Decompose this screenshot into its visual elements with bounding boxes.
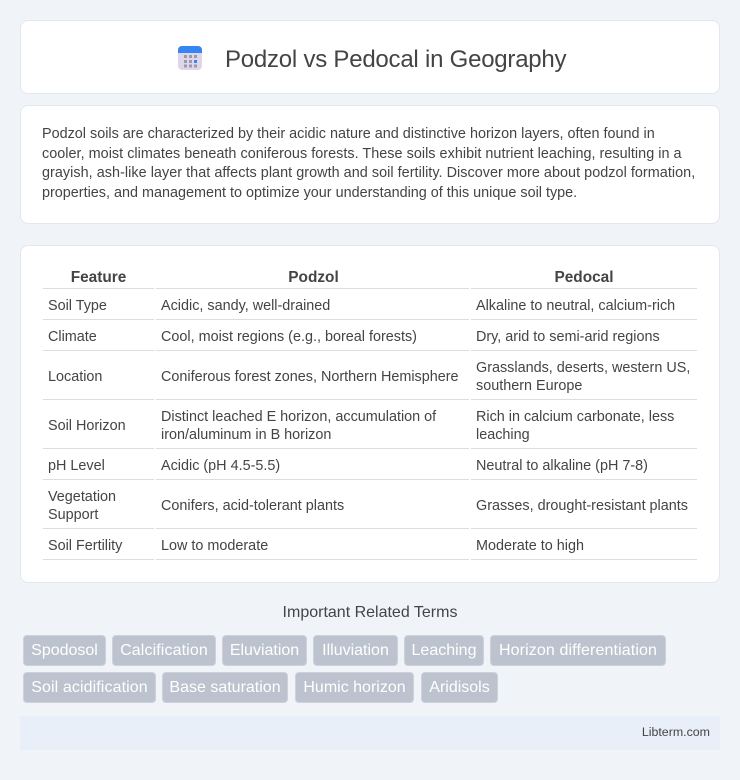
related terms tags xyxy=(23,635,666,703)
column headers: Podzol xyxy=(288,269,339,286)
tag xyxy=(222,635,307,666)
table xyxy=(43,269,697,560)
tag xyxy=(490,635,666,666)
tag: Leaching xyxy=(412,642,476,659)
tag xyxy=(112,635,216,666)
row: pH level: pH Level xyxy=(48,458,105,474)
intro paragraph: cooler, moist climates beneath coniferous forests. These soils exhibit nutrient leaching, resulting in a xyxy=(42,146,682,162)
footer bar xyxy=(20,716,720,750)
row: soil type: Soil Type xyxy=(48,298,107,314)
header panel xyxy=(20,20,720,94)
tag: Base saturation xyxy=(169,679,281,696)
tag: Humic horizon xyxy=(303,679,406,696)
intro paragraph: grayish, ash-like layer that affects plant growth and soil fertility. Discover more about podzol formation, xyxy=(42,165,695,181)
row: soil fertility xyxy=(48,538,584,554)
tag: Illuviation xyxy=(322,642,389,659)
title: Podzol vs Pedocal in Geography xyxy=(225,46,566,73)
icon: calendar xyxy=(178,46,202,70)
row: climate: Climate xyxy=(48,329,97,345)
row: pH level: Acidic (pH 4.5-5.5) xyxy=(161,458,280,474)
row: soil horizon: leaching xyxy=(476,427,530,443)
row: soil type: Alkaline to neutral, calcium-rich xyxy=(476,298,675,314)
intro text panel xyxy=(20,105,720,224)
intro paragraph xyxy=(42,126,695,200)
row: soil fertility: Moderate to high xyxy=(476,538,584,554)
column headers: Feature xyxy=(71,269,126,286)
tag xyxy=(162,672,288,703)
footer credit: Libterm.com xyxy=(642,725,710,739)
row: soil horizon: Soil Horizon xyxy=(48,418,126,434)
row: vegetation support xyxy=(48,489,688,523)
intro paragraph: properties, and management to optimize your understanding of this unique soil type. xyxy=(42,184,577,200)
row: location: Location xyxy=(48,369,102,385)
tag: Spodosol xyxy=(31,642,98,659)
row: vegetation support: Vegetation xyxy=(48,489,116,505)
comparison table panel xyxy=(20,245,720,583)
row: location: Grasslands, deserts, western US, xyxy=(476,360,690,376)
row: soil horizon: iron/aluminum in B horizon xyxy=(161,427,331,443)
tag xyxy=(295,672,414,703)
row: vegetation support: Conifers, acid-tolerant plants xyxy=(161,498,344,514)
column headers: Pedocal xyxy=(554,269,614,286)
row: soil fertility: Soil Fertility xyxy=(48,538,122,554)
tag: Eluviation xyxy=(230,642,299,659)
tag xyxy=(23,672,156,703)
row: soil type xyxy=(48,298,675,314)
related terms heading: Important Related Terms xyxy=(283,604,457,621)
tag: Horizon differentiation xyxy=(499,642,657,659)
row: climate: Dry, arid to semi-arid regions xyxy=(476,329,660,345)
row: pH level: Neutral to alkaline (pH 7-8) xyxy=(476,458,648,474)
row: soil horizon xyxy=(48,409,674,443)
tag: Soil acidification xyxy=(31,679,148,696)
row: soil fertility: Low to moderate xyxy=(161,538,268,554)
row: vegetation support: Grasses, drought-resistant plants xyxy=(476,498,688,514)
tag: Aridisols xyxy=(429,679,490,696)
row: vegetation support: Support xyxy=(48,507,98,523)
row: climate xyxy=(48,329,660,345)
column headers xyxy=(71,269,614,286)
tag xyxy=(421,672,498,703)
tag xyxy=(23,635,106,666)
row: location xyxy=(48,360,690,394)
tag xyxy=(313,635,398,666)
row: pH level xyxy=(48,458,648,474)
tag xyxy=(404,635,484,666)
intro paragraph: Podzol soils are characterized by their acidic nature and distinctive horizon layers, often found in xyxy=(42,126,655,142)
row: climate: Cool, moist regions (e.g., boreal forests) xyxy=(161,329,417,345)
row: location: Coniferous forest zones, Northern Hemisphere xyxy=(161,369,459,385)
row: soil horizon: Rich in calcium carbonate, less xyxy=(476,409,674,425)
row: soil type: Acidic, sandy, well-drained xyxy=(161,298,330,314)
row: location: southern Europe xyxy=(476,378,582,394)
row: soil horizon: Distinct leached E horizon, accumulation of xyxy=(161,409,436,425)
tag: Calcification xyxy=(120,642,208,659)
